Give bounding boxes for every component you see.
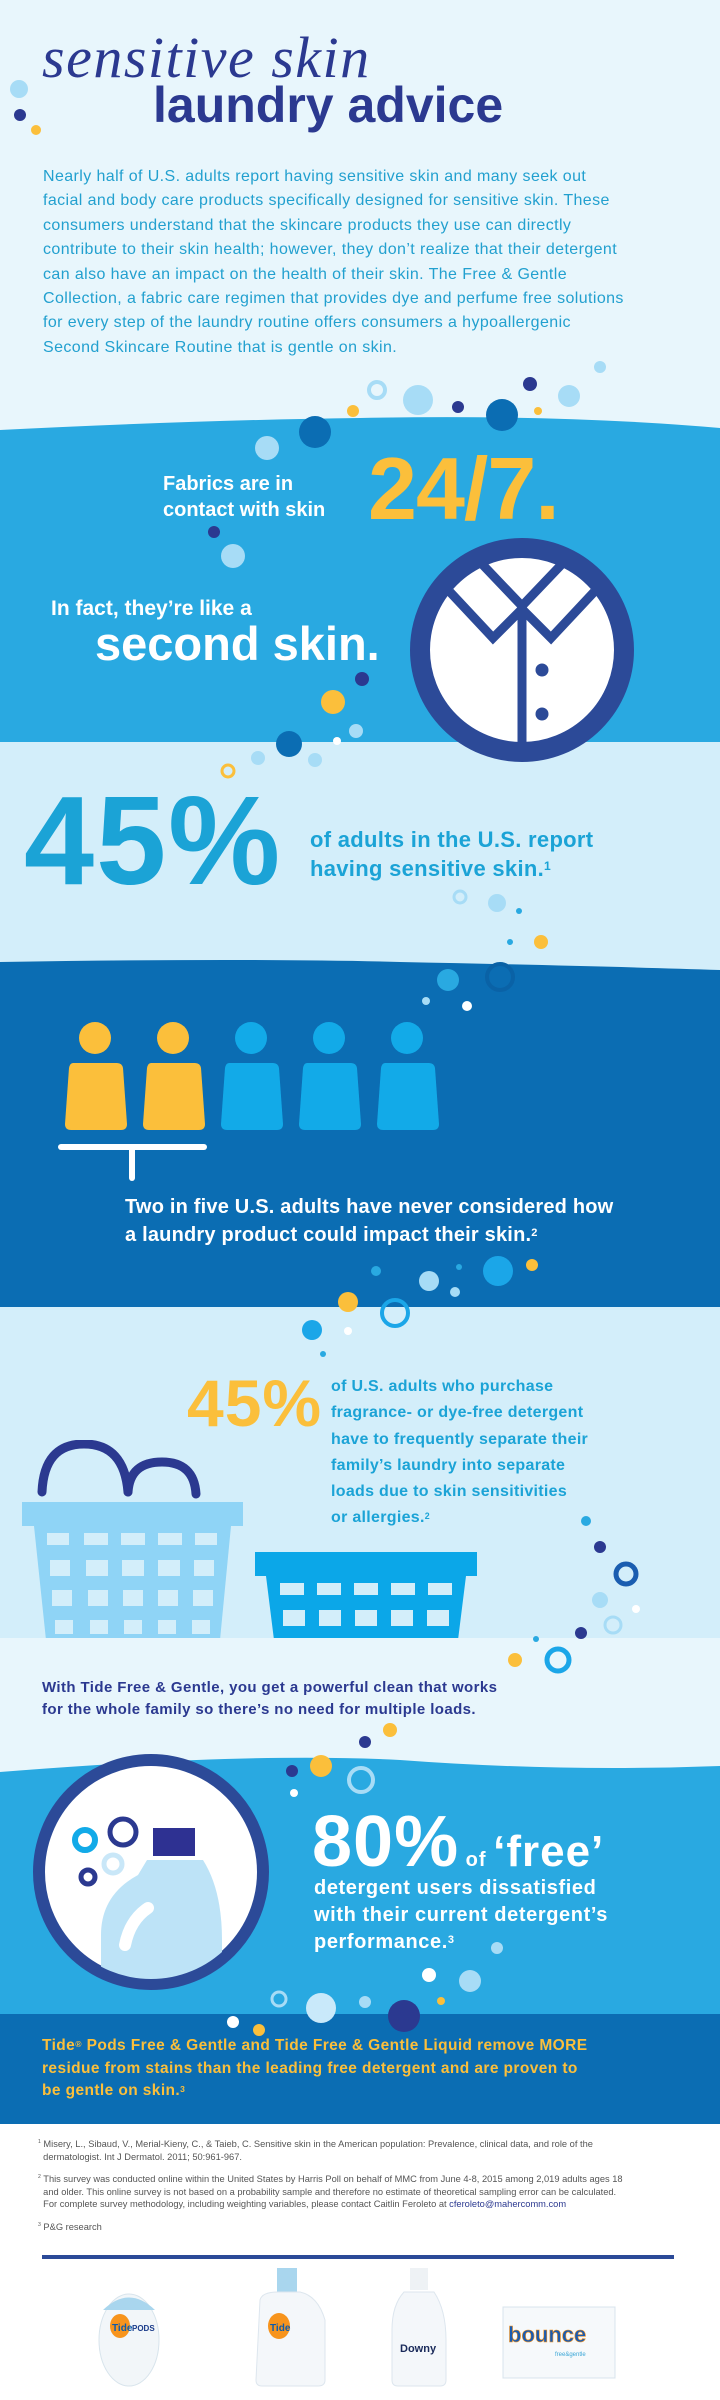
second skin text: In fact, they’re like a: [51, 597, 252, 620]
intro paragraph: facial and body care products specifically designed for sensitive skin. These: [43, 192, 610, 209]
45% separate loads stat: 45%: [187, 1366, 322, 1440]
divider line navy: [42, 2255, 674, 2259]
tide pods claim: be gentle on skin.3: [42, 2082, 185, 2099]
45% description: of adults in the U.S. report: [310, 827, 593, 852]
separate loads text: loads due to skin sensitivities: [331, 1483, 567, 1500]
icon: detergent bottle circle: [33, 1754, 269, 1990]
separate loads text: or allergies.2: [331, 1509, 430, 1526]
product: bounce: [503, 2307, 615, 2378]
product: downy: Downy: [400, 2343, 437, 2355]
separate loads text: fragrance- or dye-free detergent: [331, 1404, 583, 1421]
product: bounce: free&gentle: [555, 2352, 586, 2358]
product images: [98, 2268, 616, 2386]
footnotes: 2 This survey was conducted online within the United States by Harris Poll on behalf of MMC from June 4-8, 2015 among 2,019 adults ages 18: [38, 2174, 623, 2184]
45% stat: 45%: [24, 770, 282, 911]
icon: shirt circle: [410, 538, 634, 762]
separate loads text: of U.S. adults who purchase: [331, 1378, 553, 1395]
intro paragraph: [43, 168, 624, 356]
product: tide pods: [99, 2294, 159, 2386]
80% stat: with their current detergent’s: [314, 1904, 608, 1926]
two in five text: a laundry product could impact their skin.2: [125, 1224, 538, 1246]
80% stat: detergent users dissatisfied: [314, 1877, 596, 1899]
title: laundry advice: [153, 77, 503, 133]
footnotes: [38, 2139, 623, 2232]
intro paragraph: can also have an impact on the health of their skin. The Free & Gentle: [43, 266, 567, 283]
icon: people 2 of 5: [58, 1022, 439, 1181]
intro paragraph: Collection, a fabric care regimen that provides dye and perfume free solutions: [43, 290, 624, 307]
intro paragraph: contribute to their skin health; however, they don’t realize that their detergent: [43, 241, 617, 258]
fabrics text: contact with skin: [163, 499, 325, 521]
45% description: having sensitive skin.1: [310, 856, 551, 881]
footnotes: dermatologist. Int J Dermatol. 2011; 50:961-967.: [43, 2152, 242, 2162]
product: tide pods: PODS: [132, 2324, 155, 2333]
80% stat: performance.3: [314, 1931, 455, 1953]
second skin text: [51, 597, 380, 670]
tide free and gentle text: [42, 1679, 497, 1718]
title: sensitive skin: [42, 25, 371, 90]
product: tide liquid: Tide: [270, 2323, 291, 2334]
intro paragraph: Nearly half of U.S. adults report having sensitive skin and many seek out: [43, 168, 586, 185]
24/7 stat: 24/7.: [368, 439, 559, 538]
tide free and gentle text: for the whole family so there’s no need for multiple loads.: [42, 1701, 476, 1718]
two in five text: [125, 1196, 614, 1246]
intro paragraph: consumers understand that the skincare products they use can directly: [43, 217, 571, 234]
product: bounce: bounce: [508, 2322, 586, 2347]
80% stat: [312, 1802, 608, 1953]
separate loads text: family’s laundry into separate: [331, 1457, 565, 1474]
tide pods claim: Tide® Pods Free & Gentle and Tide Free & Gentle Liquid remove MORE: [42, 2037, 587, 2054]
icon: laundry baskets: [22, 1440, 477, 1638]
fabrics text: Fabrics are in: [163, 473, 293, 495]
product: downy: [392, 2268, 446, 2386]
separate loads text: [331, 1378, 588, 1526]
footnotes: 1 Misery, L., Sibaud, V., Merial-Kieny, C., & Taieb, C. Sensitive skin in the American population: Prevalence, clinical data, and role of the: [38, 2139, 593, 2149]
tide free and gentle text: With Tide Free & Gentle, you get a powerful clean that works: [42, 1679, 497, 1696]
product: tide pods: Tide: [112, 2323, 133, 2334]
product: tide liquid: [256, 2268, 325, 2386]
title: [42, 25, 503, 133]
tide pods claim: residue from stains than the leading free detergent and are proven to: [42, 2060, 578, 2076]
footnotes: For complete survey methodology, including weighting variables, please contact Caitlin Feroleto at cferoleto@mahercomm.com: [43, 2199, 566, 2209]
fabrics text: [163, 473, 325, 521]
45% description: [310, 827, 593, 881]
footnotes: 3 P&G research: [38, 2222, 102, 2232]
intro paragraph: for every step of the laundry routine offers consumers a hypoallergenic: [43, 314, 571, 331]
footnotes: and older. This online survey is not based on a probability sample and therefore no estimate of theoretical sampling error can be calculated.: [43, 2186, 616, 2196]
text: 80% of ‘free’: [312, 1802, 604, 1882]
second skin text: second skin.: [95, 617, 380, 670]
two in five text: Two in five U.S. adults have never considered how: [125, 1196, 613, 1218]
separate loads text: have to frequently separate their: [331, 1431, 588, 1448]
tide pods claim: [42, 2037, 587, 2099]
intro paragraph: Second Skincare Routine that is gentle on skin.: [43, 339, 397, 356]
